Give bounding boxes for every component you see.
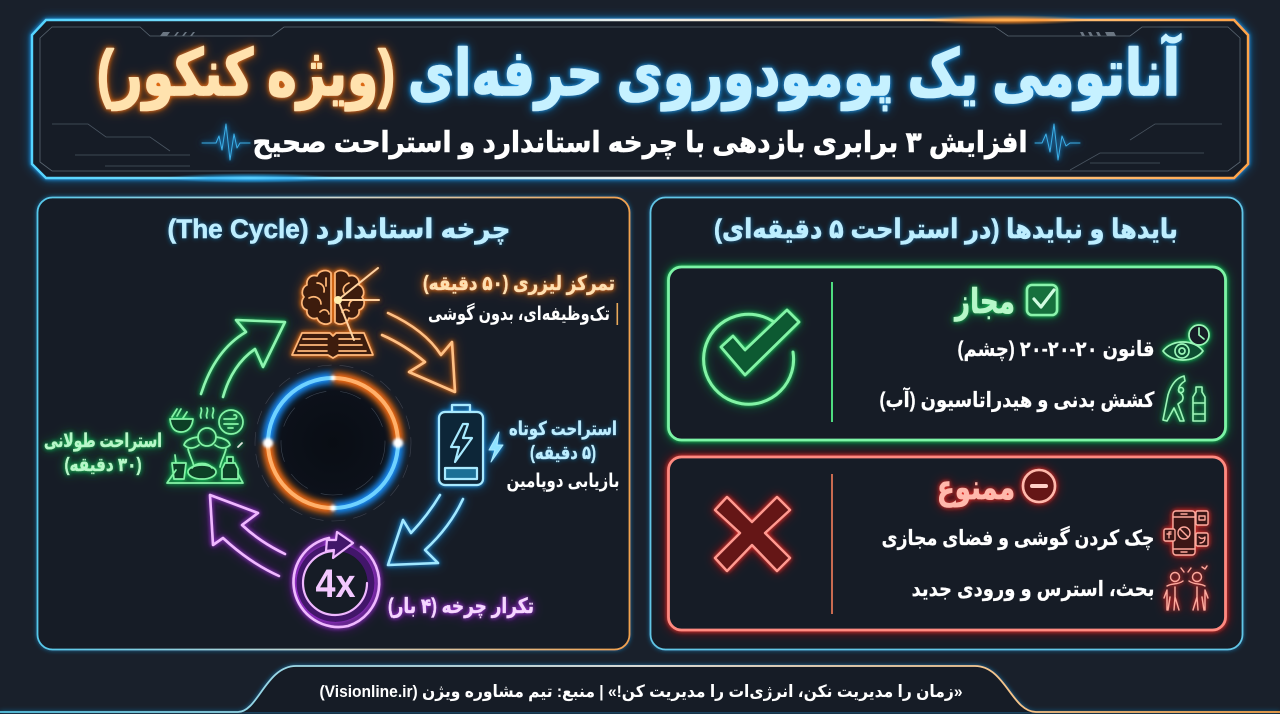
panel frame: dos and don'ts — [650, 198, 1242, 650]
footer frame — [0, 666, 1280, 712]
arrow: purple — [210, 495, 285, 576]
icon: stretch and bottle — [1163, 376, 1205, 421]
item: stretch and hydration: کشش بدنی و هیدراتاسیون (آب) — [880, 387, 1155, 412]
card: forbidden — [668, 457, 1226, 630]
icon: large X — [715, 497, 790, 571]
icon: brain and book — [292, 268, 379, 358]
label minutes: long rest: (۳۰ دقیقه) — [64, 455, 142, 476]
header banner — [32, 15, 1248, 183]
heading: cycle: چرخه استاندارد (The Cycle) — [168, 214, 510, 245]
subtitle: افزایش ۳ برابری بازدهی با چرخه استاندارد و استراحت صحیح — [252, 127, 1028, 160]
icon: long rest person with food — [167, 408, 243, 483]
icon: minus circle — [1023, 470, 1055, 502]
heading: dos and don'ts: بایدها و نبایدها (در استراحت ۵ دقیقه‌ای) — [714, 214, 1178, 245]
arrow: blue — [388, 495, 463, 565]
icon: arguing people — [1164, 566, 1208, 610]
label: laser focus — [423, 273, 618, 325]
item: stress: بحث، استرس و ورودی جدید — [912, 578, 1154, 601]
icon: battery — [439, 405, 503, 485]
label minutes: short rest: (۵ دقیقه) — [530, 443, 596, 464]
card frame: allowed — [668, 267, 1226, 440]
icon: heartbeat left — [202, 124, 250, 160]
card: allowed — [668, 267, 1226, 440]
icon: phone and social apps — [1164, 511, 1208, 555]
icon: eye and clock — [1163, 325, 1209, 360]
card frame: forbidden — [668, 457, 1226, 630]
icon: 4x repeat — [293, 532, 379, 627]
label: 4x: 4x — [316, 562, 356, 606]
panel frame: cycle — [38, 198, 630, 650]
arrow: green — [201, 320, 285, 397]
title — [97, 33, 1182, 111]
label title: short rest: استراحت کوتاه — [509, 419, 617, 440]
label: short rest — [506, 419, 620, 492]
heading: allowed: مجاز — [953, 283, 1015, 321]
heading: forbidden: ممنوع — [937, 469, 1015, 508]
arrow: orange — [382, 313, 455, 392]
label title: laser focus: تمرکز لیزری (۵۰ دقیقه) — [423, 273, 615, 295]
header frame — [32, 20, 1248, 178]
icon: small bolt — [489, 432, 503, 462]
icon: check box — [1027, 285, 1057, 315]
label detail: laser focus: تک‌وظیفه‌ای، بدون گوشی — [428, 302, 610, 325]
footer bar — [0, 666, 1280, 712]
label: long rest — [44, 431, 162, 476]
label detail: short rest: بازیابی دوپامین — [506, 471, 620, 492]
icon: heartbeat right — [1035, 124, 1080, 160]
panel: dos and don'ts — [650, 198, 1242, 650]
label title: long rest: استراحت طولانی — [44, 431, 162, 452]
title: orange part: (ویژه کنکور) — [97, 37, 395, 111]
central ring — [255, 365, 411, 521]
label: repeat cycle: تکرار چرخه (۴ بار) — [388, 595, 534, 618]
footer text: «زمان را مدیریت نکن، انرژی‌ات را مدیریت کن!» | منبع: تیم مشاوره ویژن (Visionline.ir) — [320, 682, 963, 702]
item: eye rule: قانون ۲۰-۲۰-۲۰ (چشم) — [957, 338, 1154, 361]
panel: the cycle — [38, 198, 630, 650]
item: phone check: چک کردن گوشی و فضای مجازی — [882, 525, 1154, 550]
icon: large check circle — [704, 310, 799, 404]
